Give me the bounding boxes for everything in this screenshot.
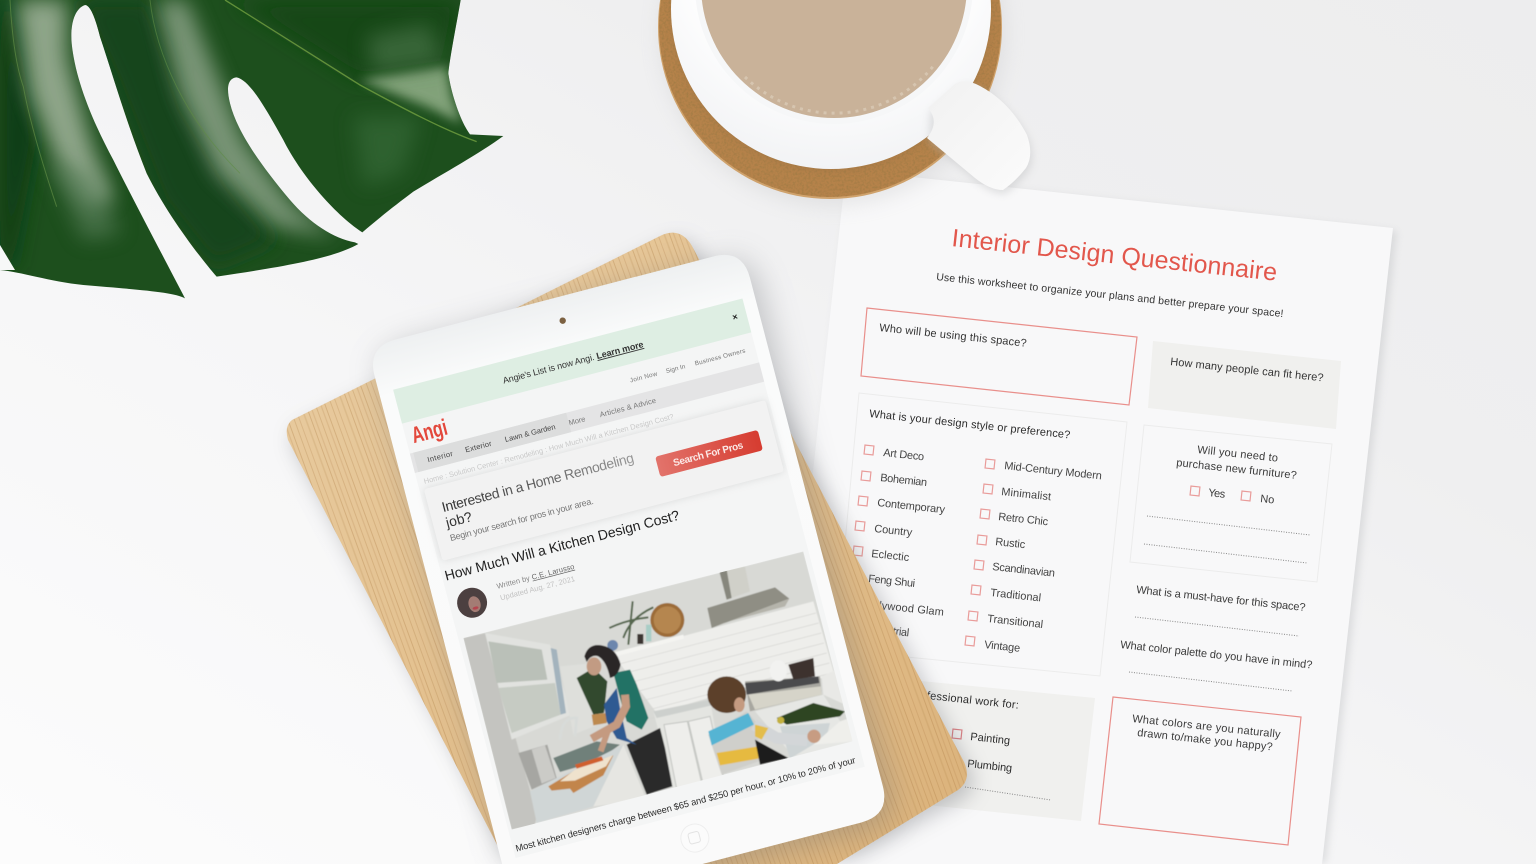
author byline: Updated Aug. 27, 2021 <box>499 574 576 602</box>
announcement banner: × <box>731 311 739 322</box>
worksheet subtitle: Use this worksheet to organize your plans and better prepare your space! <box>936 271 1284 320</box>
box: how many people <box>1148 341 1341 429</box>
box: how many people: How many people can fit here? <box>1170 356 1324 384</box>
call to action card <box>424 400 784 561</box>
author byline <box>496 562 578 602</box>
question: color palette: What color palette do you have in mind? <box>1120 639 1313 671</box>
panel: design style checklist: Vintage <box>984 639 1021 655</box>
breadcrumb: Home : Solution Center : Remodeling : How Much Will a Kitchen Design Cost? <box>423 412 675 486</box>
panel: design style checklist: Rustic <box>995 536 1026 551</box>
panel: design style checklist: Mid-Century Modern <box>1004 460 1102 482</box>
announcement banner <box>393 298 751 424</box>
call to action card: job? <box>443 508 474 531</box>
navigation band: Interior <box>426 449 454 464</box>
coaster and coffee cup <box>658 0 1032 205</box>
Angi logo: Angi <box>409 414 450 448</box>
panel: design style checklist: Retro Chic <box>998 511 1049 528</box>
panel: design style checklist: Minimalist <box>1001 486 1052 503</box>
kitchen photo <box>463 551 853 830</box>
screen background <box>393 298 865 858</box>
search button: Search For Pros <box>672 440 745 469</box>
wooden board <box>287 233 973 864</box>
box: who will be using this space: Who will be using this space? <box>879 322 1027 350</box>
panel: design style checklist <box>835 393 1127 676</box>
panel: design style checklist: Traditional <box>990 587 1042 604</box>
panel: furniture question: purchase new furniture? <box>1176 457 1297 482</box>
author byline: Written by C.E. Larusso <box>496 562 575 591</box>
panel: furniture question: Will you need to <box>1197 444 1278 465</box>
monstera leaf <box>0 0 503 298</box>
home button <box>678 821 712 855</box>
cup <box>671 0 991 171</box>
panel: design style checklist: Contemporary <box>877 497 946 516</box>
panel: design style checklist: Bohemian <box>880 472 928 489</box>
top links: Business Owners <box>694 348 746 367</box>
panel: professional work <box>860 677 1095 821</box>
call to action card: Begin your search for pros in your area. <box>449 496 595 543</box>
author avatar <box>454 584 490 621</box>
panel: design style checklist: Transitional <box>987 613 1044 631</box>
question: color palette <box>1120 639 1313 691</box>
box: happy colors <box>1099 697 1301 845</box>
cork coaster <box>658 0 1002 199</box>
navigation band <box>410 362 764 473</box>
navigation band: Lawn & Garden <box>504 422 556 444</box>
camera <box>559 317 567 325</box>
panel: professional work: Professional work for: <box>909 688 1019 712</box>
top links: Sign In <box>665 363 687 375</box>
panel: design style checklist: Country <box>874 523 913 539</box>
panel: furniture question <box>1130 425 1332 582</box>
panel: professional work: Painting <box>970 731 1011 747</box>
question: must-have <box>1135 584 1306 636</box>
article heading: How Much Will a Kitchen Design Cost? <box>443 507 681 583</box>
panel: furniture question: No <box>1260 493 1275 506</box>
panel: design style checklist: Industrial <box>868 623 910 639</box>
article body text: Most kitchen designers charge between $65 and $250 per hour, or 10% to 20% of your <box>514 755 857 854</box>
navigation band: Articles & Advice <box>599 396 657 419</box>
call to action card: Interested in a Home Remodeling <box>440 449 636 515</box>
top links: Join Now <box>629 370 659 384</box>
panel: design style checklist: Eclectic <box>871 548 910 564</box>
coffee <box>701 0 967 118</box>
tablet <box>367 247 898 864</box>
panel: furniture question: Yes <box>1208 487 1226 501</box>
panel: professional work: Plumbing <box>967 758 1013 775</box>
box: who will be using this space <box>861 308 1137 405</box>
top links <box>629 348 746 384</box>
navigation band: Exterior <box>464 439 493 454</box>
search button <box>655 430 763 477</box>
box: happy colors: drawn to/make you happy? <box>1137 727 1273 753</box>
announcement banner: Angie's List is now Angi. Learn more <box>502 339 644 386</box>
panel: design style checklist: Feng Shui <box>868 573 916 590</box>
panel: design style checklist: Scandinavian <box>992 561 1056 580</box>
question: must-have: What is a must-have for this space? <box>1136 584 1306 614</box>
panel: design style checklist: Hollywood Glam <box>862 598 944 619</box>
panel: design style checklist: Art Deco <box>883 447 925 463</box>
panel: design style checklist: What is your design style or preference? <box>869 408 1071 441</box>
worksheet title: Interior Design Questionnaire <box>950 224 1278 287</box>
box: happy colors: What colors are you naturally <box>1132 713 1282 741</box>
navigation band: More <box>568 414 586 427</box>
cup handle <box>927 81 1032 194</box>
worksheet paper <box>770 170 1397 864</box>
